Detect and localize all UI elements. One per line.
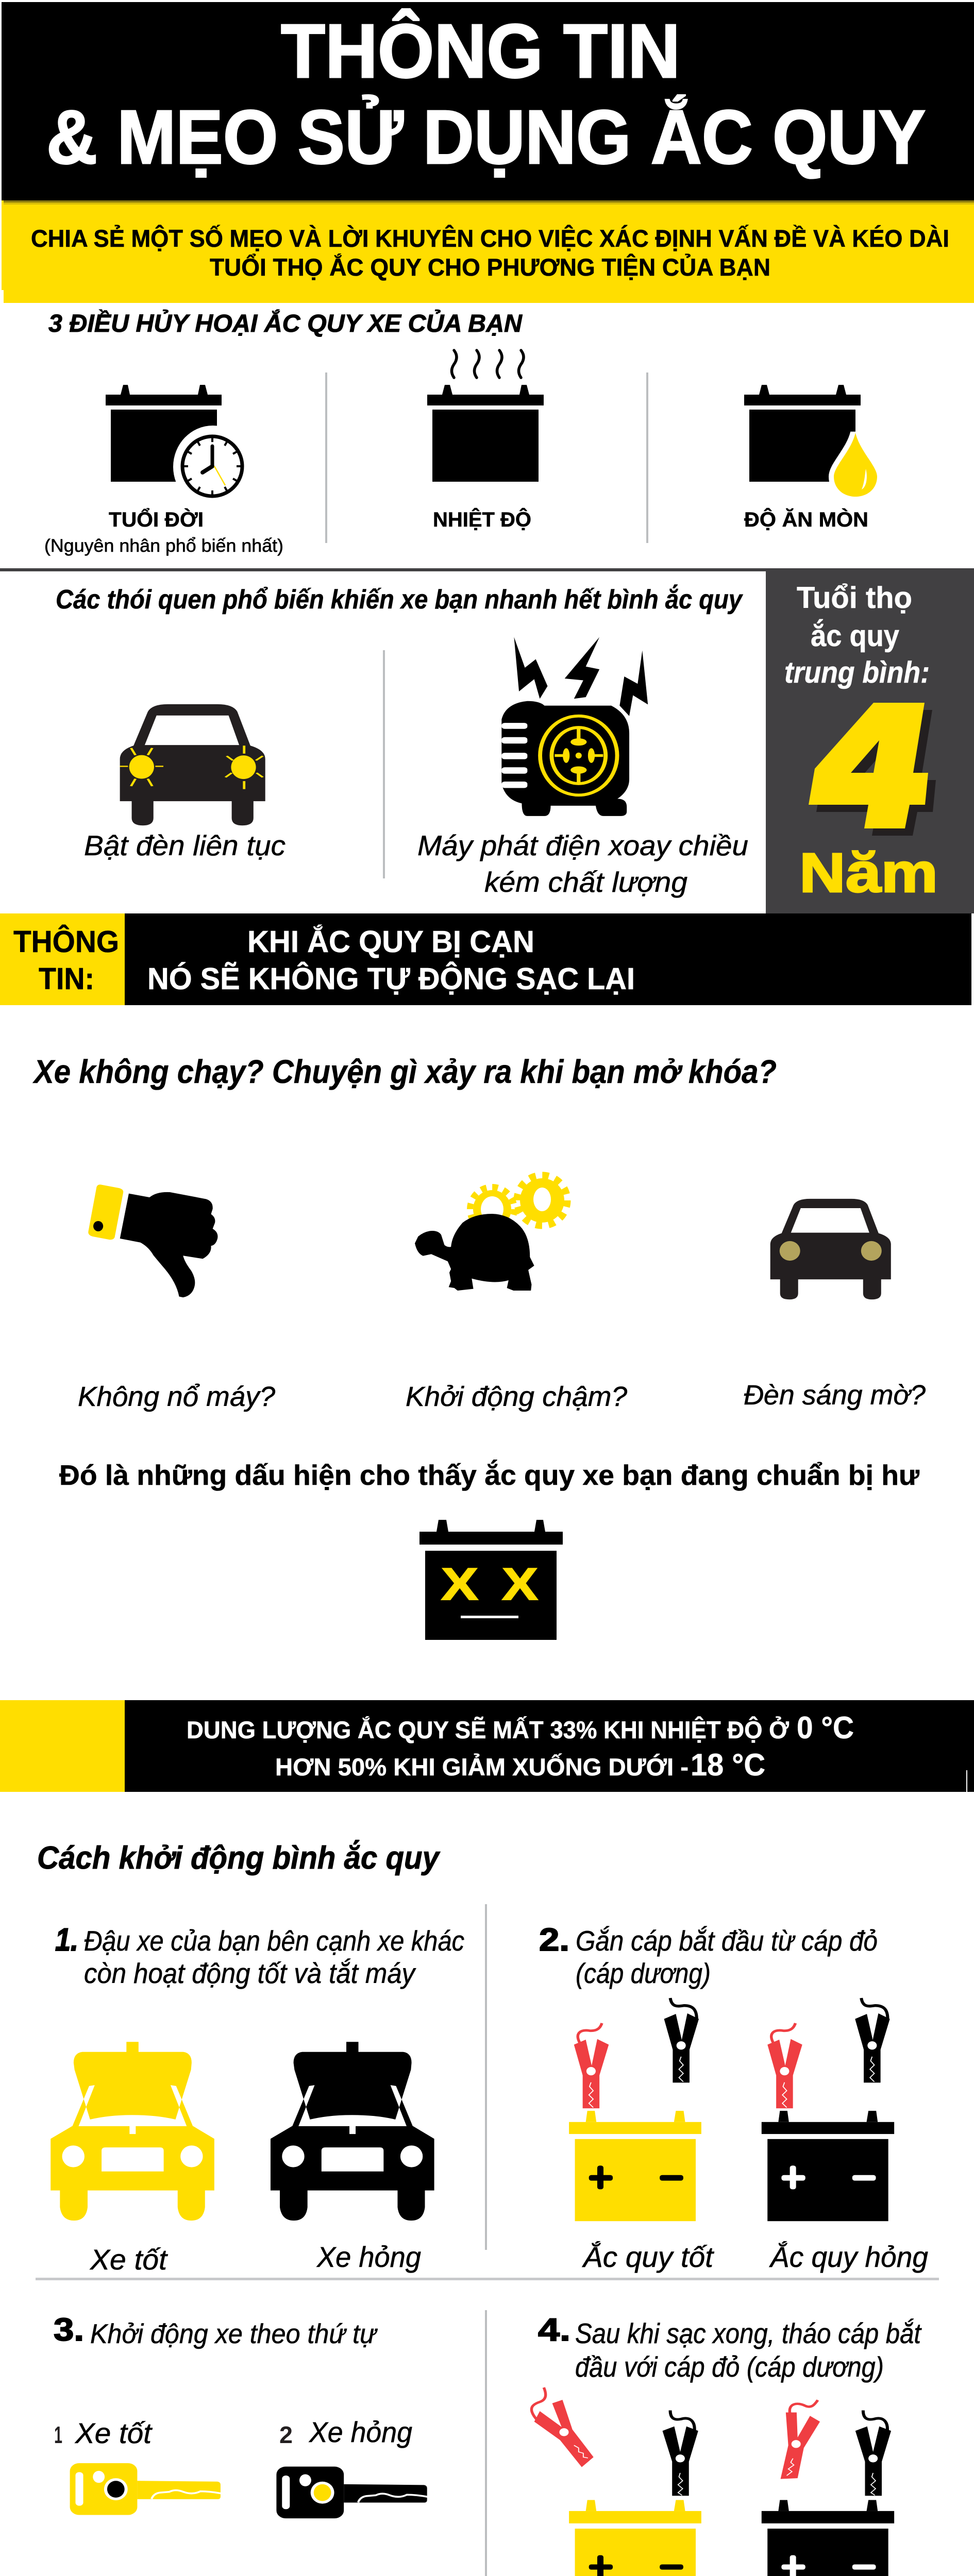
icon: thumb down [88, 1184, 217, 1297]
icon: good car with open hood [51, 2042, 214, 2221]
icon: car with headlights on [120, 704, 265, 825]
icon: batteries and removed clamps [531, 2387, 894, 2576]
callout: capacity loss [0, 1700, 974, 1792]
black clamp, dead battery [855, 2410, 891, 2496]
step 2 [539, 1922, 928, 2273]
red clamp, dead battery [767, 2023, 802, 2108]
tip label line 1: THÔNG [13, 924, 119, 959]
label: good car: Xe tốt [89, 2243, 168, 2276]
label: dead car: Xe hỏng [308, 2416, 412, 2448]
label: no start: Không nổ máy? [78, 1381, 275, 1412]
statement: signs of failing battery: Đó là những dấu hiện cho thấy ắc quy xe bạn đang chuẩn bị hư [59, 1459, 919, 1491]
title line 1: THÔNG TIN [281, 8, 680, 94]
step 2 text line 1: Gắn cáp bắt đầu từ cáp đỏ [576, 1925, 878, 1957]
order number 2: 2 [279, 2421, 293, 2448]
icon: dead battery [419, 1520, 563, 1640]
label: corrosion: ĐỘ ĂN MÒN [744, 507, 868, 531]
tip text line 2: NÓ SẼ KHÔNG TỰ ĐỘNG SẠC LẠI [147, 961, 635, 996]
icon: battery with drop [744, 385, 877, 497]
step 4 text line 2: đầu với cáp đỏ (cáp dương) [575, 2351, 884, 2383]
red clamp removed, dead battery [781, 2400, 820, 2479]
step 2 number: 2. [539, 1922, 569, 1958]
step 1 number: 1. [55, 1922, 78, 1958]
label: poor alternator line 1: Máy phát điện xoay chiều [417, 829, 748, 861]
label: most common cause: (Nguyên nhân phổ biến nhất) [44, 536, 283, 556]
word: years: Năm [799, 841, 938, 904]
icon: yellow key [70, 2463, 221, 2515]
capacity line 2: HƠN 50% KHI GIẢM XUỐNG DƯỚI - [275, 1753, 688, 1781]
label: lights always on: Bật đèn liên tục [84, 829, 286, 861]
capacity line 1: DUNG LƯỢNG ẮC QUY SẼ MẤT 33% KHI NHIỆT ĐỘ Ở [187, 1716, 790, 1743]
step 3 [54, 2312, 428, 2576]
title line 2: & MẸO SỬ DỤNG ẮC QUY [46, 94, 926, 180]
capacity value 1: 0 °C [797, 1710, 854, 1745]
tip text line 1: KHI ẮC QUY BỊ CẠN [247, 924, 534, 959]
icon: alternator [501, 637, 648, 816]
icon: dead car with open hood [271, 2042, 434, 2221]
label: good battery: Ắc quy tốt [582, 2241, 714, 2273]
icon: car with dim lights [770, 1199, 891, 1299]
icon: black key [276, 2467, 428, 2518]
label: slow start: Khởi động chậm? [406, 1381, 627, 1412]
number 4 [809, 703, 936, 836]
icon: battery with clock [106, 385, 253, 508]
red clamp removed, good battery [531, 2387, 594, 2467]
heading: car won't start: Xe không chạy? Chuyện gì xảy ra khi bạn mở khóa? [32, 1053, 777, 1090]
label: temperature: NHIỆT ĐỘ [433, 507, 531, 531]
step 1 [51, 1922, 464, 2276]
label: poor alternator line 2: kém chất lượng [484, 866, 687, 898]
step 1 text line 2: còn hoạt động tốt và tắt máy [84, 1957, 416, 1989]
callout: tip 1 [0, 913, 971, 1005]
step 4 [531, 2312, 930, 2576]
step 3 text: Khởi động xe theo thứ tự [90, 2319, 378, 2349]
label: good car: Xe tốt [74, 2417, 153, 2449]
title banner [2, 2, 974, 200]
life text line 2: ắc quy [811, 619, 899, 653]
black clamp, good battery [663, 2410, 698, 2496]
label: dim lights: Đèn sáng mờ? [744, 1380, 926, 1411]
order number 1: 1 [54, 2421, 62, 2448]
icon: dead battery: X [502, 1558, 538, 1609]
step 2 text line 2: (cáp dương) [576, 1957, 711, 1989]
icon: turtle with gears [415, 1175, 567, 1291]
black clamp, good battery [664, 1998, 699, 2082]
step 1 text line 1: Đậu xe của bạn bên cạnh xe khác [84, 1925, 464, 1957]
panel: average battery life [766, 569, 974, 913]
subtitle line 2: TUỔI THỌ ẮC QUY CHO PHƯƠNG TIỆN CỦA BẠN [210, 253, 770, 281]
label: age: TUỔI ĐỜI [109, 507, 204, 531]
heading: how to jump start: Cách khởi động bình ắc quy [37, 1840, 441, 1876]
heading: common habits: Các thói quen phổ biến khiến xe bạn nhanh hết bình ắc quy [56, 584, 744, 615]
subtitle line 1: CHIA SẺ MỘT SỐ MẸO VÀ LỜI KHUYÊN CHO VIỆC XÁC ĐỊNH VẤN ĐỀ VÀ KÉO DÀI [31, 225, 949, 252]
step 3 number: 3. [54, 2312, 84, 2348]
label: dead car: Xe hỏng [316, 2241, 421, 2273]
icon: dead battery: X [441, 1558, 478, 1609]
subtitle band [2, 200, 974, 303]
step 4 number: 4. [538, 2312, 570, 2348]
step 4 text line 1: Sau khi sạc xong, tháo cáp bắt [575, 2317, 922, 2349]
life text line 3: trung bình: [784, 656, 930, 689]
label: dead battery: Ắc quy hỏng [769, 2241, 928, 2273]
icon: battery with heat [427, 350, 544, 482]
heading: 3 things: 3 ĐIỀU HỦY HOẠI ẮC QUY XE CỦA BẠN [48, 309, 523, 337]
black clamp, dead battery [855, 1998, 890, 2082]
icon: batteries and clamps [569, 1998, 894, 2221]
capacity value 2: 18 °C [691, 1748, 765, 1782]
red clamp, good battery [574, 2023, 609, 2108]
tip label line 2: TIN: [39, 962, 94, 996]
life text line 1: Tuổi thọ [797, 581, 912, 615]
